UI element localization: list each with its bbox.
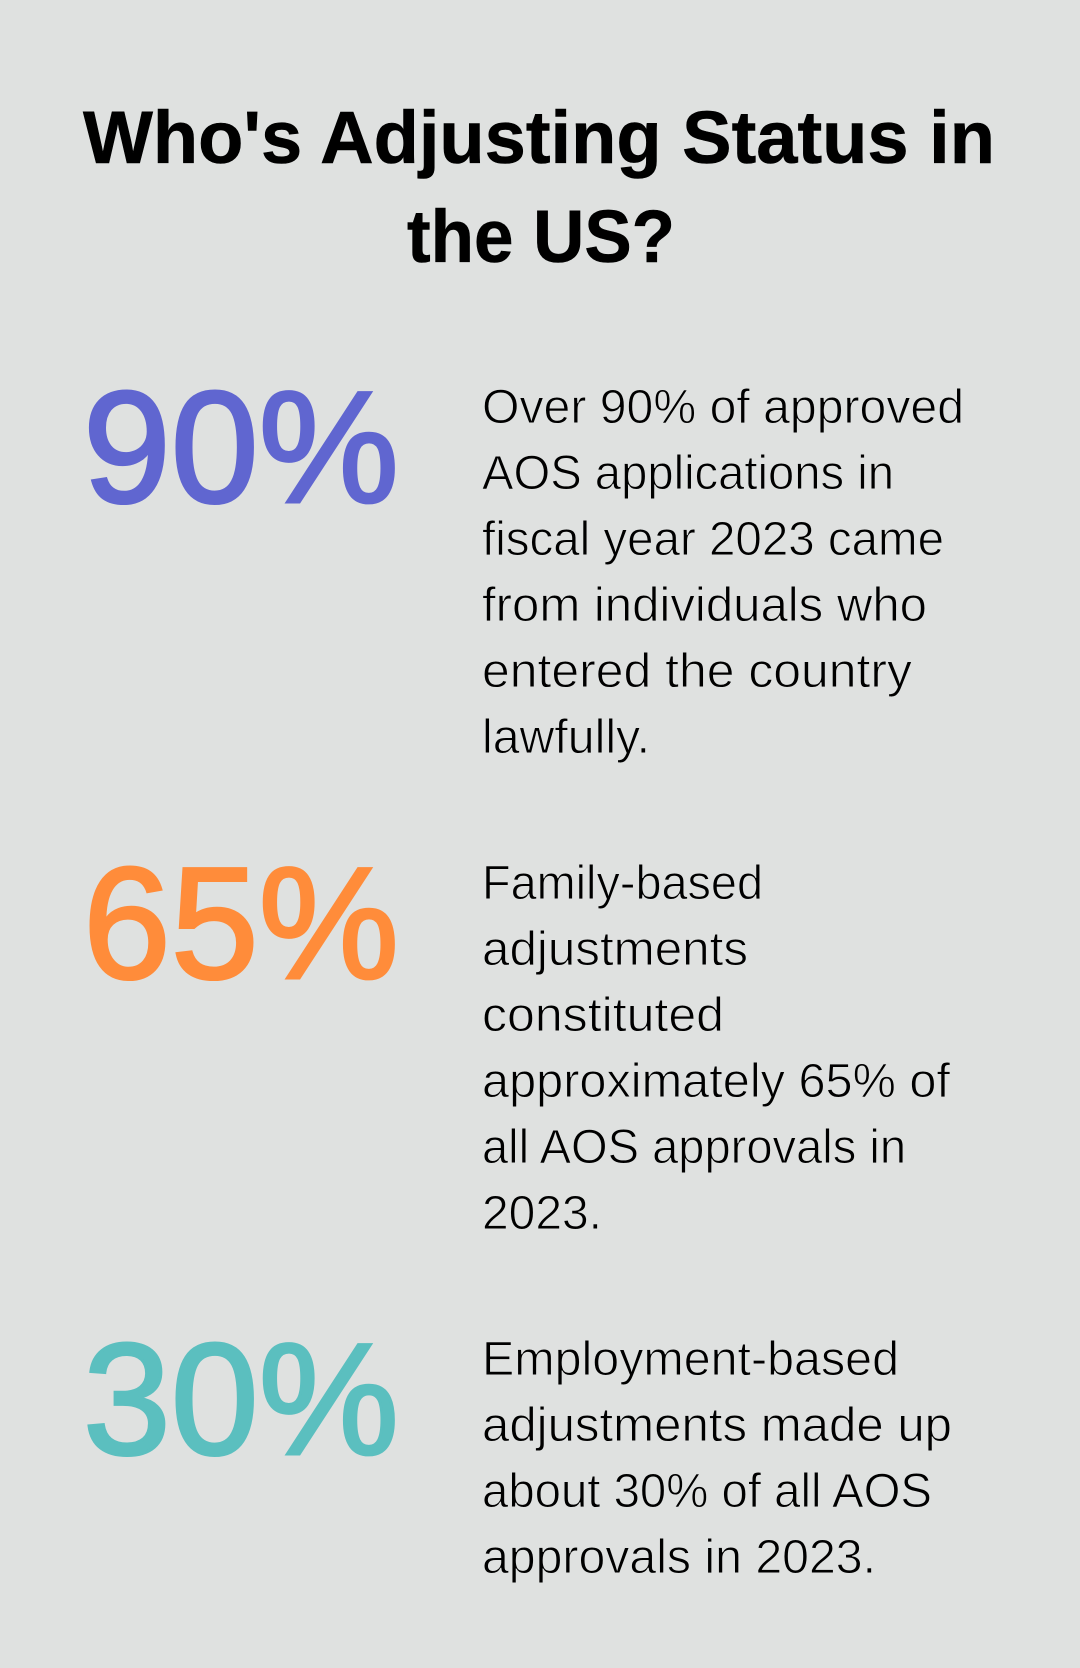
panel: 30% stat (83, 1310, 952, 1584)
text block: 65% description: approximately 65% of (482, 1055, 951, 1108)
text block: 30% description: adjustments made up (482, 1399, 952, 1452)
title: the US? (407, 195, 675, 278)
stat number: 90%: 90% (83, 358, 399, 536)
text block: 30% description: Employment-based (482, 1333, 899, 1386)
text block: 90% description: Over 90% of approved (482, 381, 964, 434)
text block: 90% description: from individuals who (482, 579, 927, 632)
text block: 90% description: AOS applications in (482, 447, 894, 500)
panel: 65% stat (83, 834, 951, 1240)
panel: 90% stat (83, 358, 964, 764)
title (83, 96, 995, 278)
title: Who's Adjusting Status in (83, 96, 995, 179)
text block: 90% description: fiscal year 2023 came (482, 513, 944, 566)
text block: 65% description: 2023. (482, 1187, 602, 1240)
text block: 65% description: all AOS approvals in (482, 1121, 906, 1174)
text block: 65% description: constituted (482, 989, 724, 1042)
text block: 90% description: lawfully. (482, 711, 650, 764)
text block: 30% description: approvals in 2023. (482, 1531, 876, 1584)
text block: 65% description: Family-based (482, 857, 763, 910)
text block: 30% description: about 30% of all AOS (482, 1465, 932, 1518)
text block: 90% description: entered the country (482, 645, 912, 698)
stat number: 30%: 30% (83, 1310, 399, 1488)
stat number: 65%: 65% (83, 834, 399, 1012)
text block: 65% description: adjustments (482, 923, 748, 976)
text block: 90% description (482, 381, 964, 764)
text block: 65% description (482, 857, 951, 1240)
text block: 30% description (482, 1333, 952, 1584)
